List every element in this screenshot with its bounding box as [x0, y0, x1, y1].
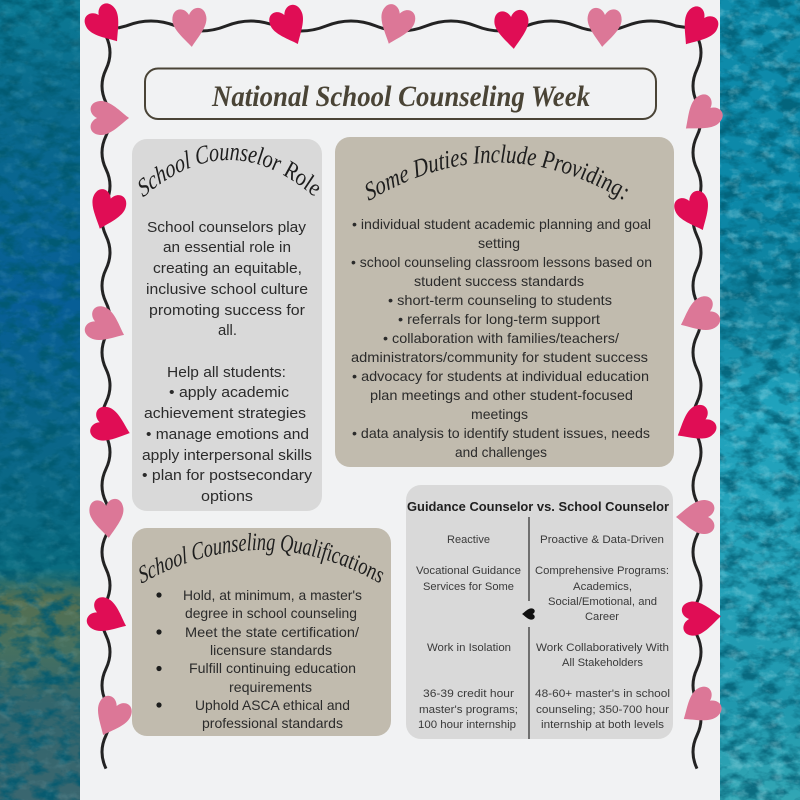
column: school counselor: Comprehensive Programs:	[535, 565, 669, 577]
page sheet	[80, 0, 720, 800]
text block: role description: options	[201, 488, 253, 505]
bullets	[156, 592, 162, 708]
column: school counselor: Career	[585, 611, 619, 623]
text block: role description: School counselors play	[147, 219, 307, 236]
panel: guidance vs school counselor comparison	[406, 485, 673, 739]
text block: duties list: plan meetings and other student-focused	[370, 387, 633, 403]
divider with heart	[522, 517, 535, 739]
text block: duties list: • collaboration with families/teachers/	[383, 330, 619, 346]
text block: duties list: • data analysis to identify student issues, needs	[352, 425, 650, 441]
text block: role description: Help all students:	[167, 364, 286, 381]
panel: qualifications	[132, 528, 391, 736]
text block: role description: inclusive school culture	[146, 281, 308, 298]
text block: qualifications list: professional standards	[202, 715, 343, 731]
column: guidance counselor: master's programs;	[419, 704, 518, 716]
text block: role description	[142, 219, 313, 505]
text block: qualifications list: requirements	[229, 679, 312, 695]
column: guidance counselor: Vocational Guidance	[416, 565, 521, 577]
text block: role description: promoting success for	[149, 302, 305, 319]
heart garland border	[81, 0, 726, 769]
title: National School Counseling Week	[211, 80, 590, 113]
text block: duties list: meetings	[471, 406, 528, 422]
text block: qualifications list: Uphold ASCA ethical and	[195, 697, 350, 713]
text block: duties list: administrators/community for student success	[351, 349, 648, 365]
column: guidance counselor: 36-39 credit hour	[423, 688, 514, 700]
text block: role description: • apply academic	[169, 384, 290, 401]
text block: qualifications list: Fulfill continuing education	[189, 660, 356, 676]
text block: qualifications list: degree in school counseling	[185, 605, 357, 621]
text block: qualifications list: Hold, at minimum, a master's	[183, 587, 362, 603]
panel: duties	[335, 137, 674, 467]
text block: role description: • manage emotions and	[146, 426, 309, 443]
text block: duties list: • referrals for long-term support	[398, 311, 600, 327]
heading: duties: Some Duties Include Providing:	[366, 144, 628, 200]
text block: duties list: • individual student academic planning and goal	[352, 216, 651, 232]
text block: duties list: student success standards	[414, 273, 584, 289]
text block: duties list	[351, 216, 652, 460]
column: guidance counselor: Reactive	[447, 534, 490, 546]
text block: role description: all.	[218, 322, 237, 339]
text block: duties list: • advocacy for students at individual education	[352, 368, 649, 384]
column: school counselor: counseling; 350-700 hour	[536, 704, 669, 716]
column: guidance counselor: Services for Some	[423, 581, 514, 593]
heading: comparison: Guidance Counselor vs. School Counselor	[407, 499, 669, 514]
text block: role description: • plan for postsecondary	[142, 467, 313, 484]
title banner	[145, 68, 656, 119]
text block: duties list: setting	[478, 235, 520, 251]
text block: role description: an essential role in	[163, 239, 291, 256]
panel: school counselor role	[132, 139, 322, 511]
text block: duties list: • short-term counseling to students	[388, 292, 612, 308]
column: school counselor	[535, 534, 670, 731]
heading: school counselor role: School Counselor Role	[138, 145, 320, 197]
background: left teal texture	[0, 0, 80, 800]
background: right teal texture	[720, 0, 800, 800]
column: school counselor: Proactive & Data-Driven	[540, 534, 664, 546]
heading: qualifications: School Counseling Qualifications	[139, 532, 384, 583]
text block: qualifications list: Meet the state certification/	[185, 624, 359, 640]
column: school counselor: Academics,	[573, 581, 632, 593]
column: school counselor: All Stakeholders	[562, 657, 643, 669]
column: school counselor: Work Collaboratively With	[536, 642, 669, 654]
column: school counselor: internship at both levels	[541, 719, 665, 731]
column: school counselor: Social/Emotional, and	[548, 596, 657, 608]
text block: qualifications list: licensure standards	[210, 642, 332, 658]
column: guidance counselor: 100 hour internship	[418, 719, 516, 731]
text block: role description: creating an equitable,	[153, 260, 302, 277]
text block: qualifications list	[183, 587, 362, 731]
column: school counselor: 48-60+ master's in school	[535, 688, 670, 700]
text block: role description: achievement strategies	[144, 405, 306, 422]
text block: role description: apply interpersonal skills	[142, 447, 312, 464]
text block: duties list: • school counseling classroom lessons based on	[351, 254, 652, 270]
column: guidance counselor: Work in Isolation	[427, 642, 511, 654]
column: guidance counselor	[416, 534, 521, 731]
text block: duties list: and challenges	[455, 444, 547, 460]
